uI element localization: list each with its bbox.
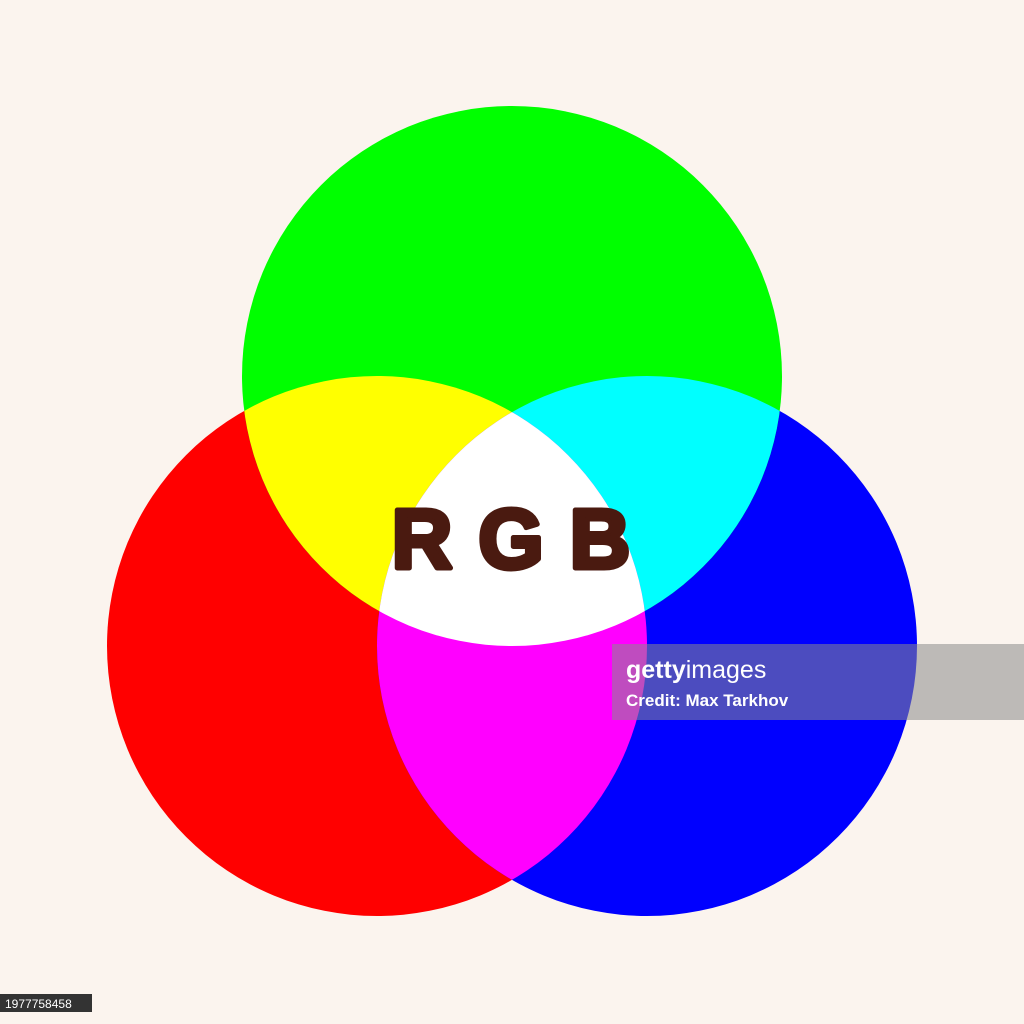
overlap: white	[379, 412, 645, 646]
title: RGB: RGB	[392, 492, 656, 586]
overlap: magenta	[377, 412, 647, 880]
venn diagram	[107, 106, 917, 916]
watermark: credit: Credit: Max Tarkhov	[626, 691, 789, 710]
circle: blue	[377, 376, 917, 916]
overlap: yellow	[244, 376, 645, 612]
watermark band	[612, 644, 1024, 720]
circle: red	[107, 376, 647, 916]
watermark: gettyimages: gettyimages	[626, 656, 766, 684]
overlap: cyan	[379, 376, 780, 612]
circle: green	[242, 106, 782, 646]
image id tag: 1977758458	[5, 997, 72, 1011]
image id tag	[0, 994, 92, 1012]
